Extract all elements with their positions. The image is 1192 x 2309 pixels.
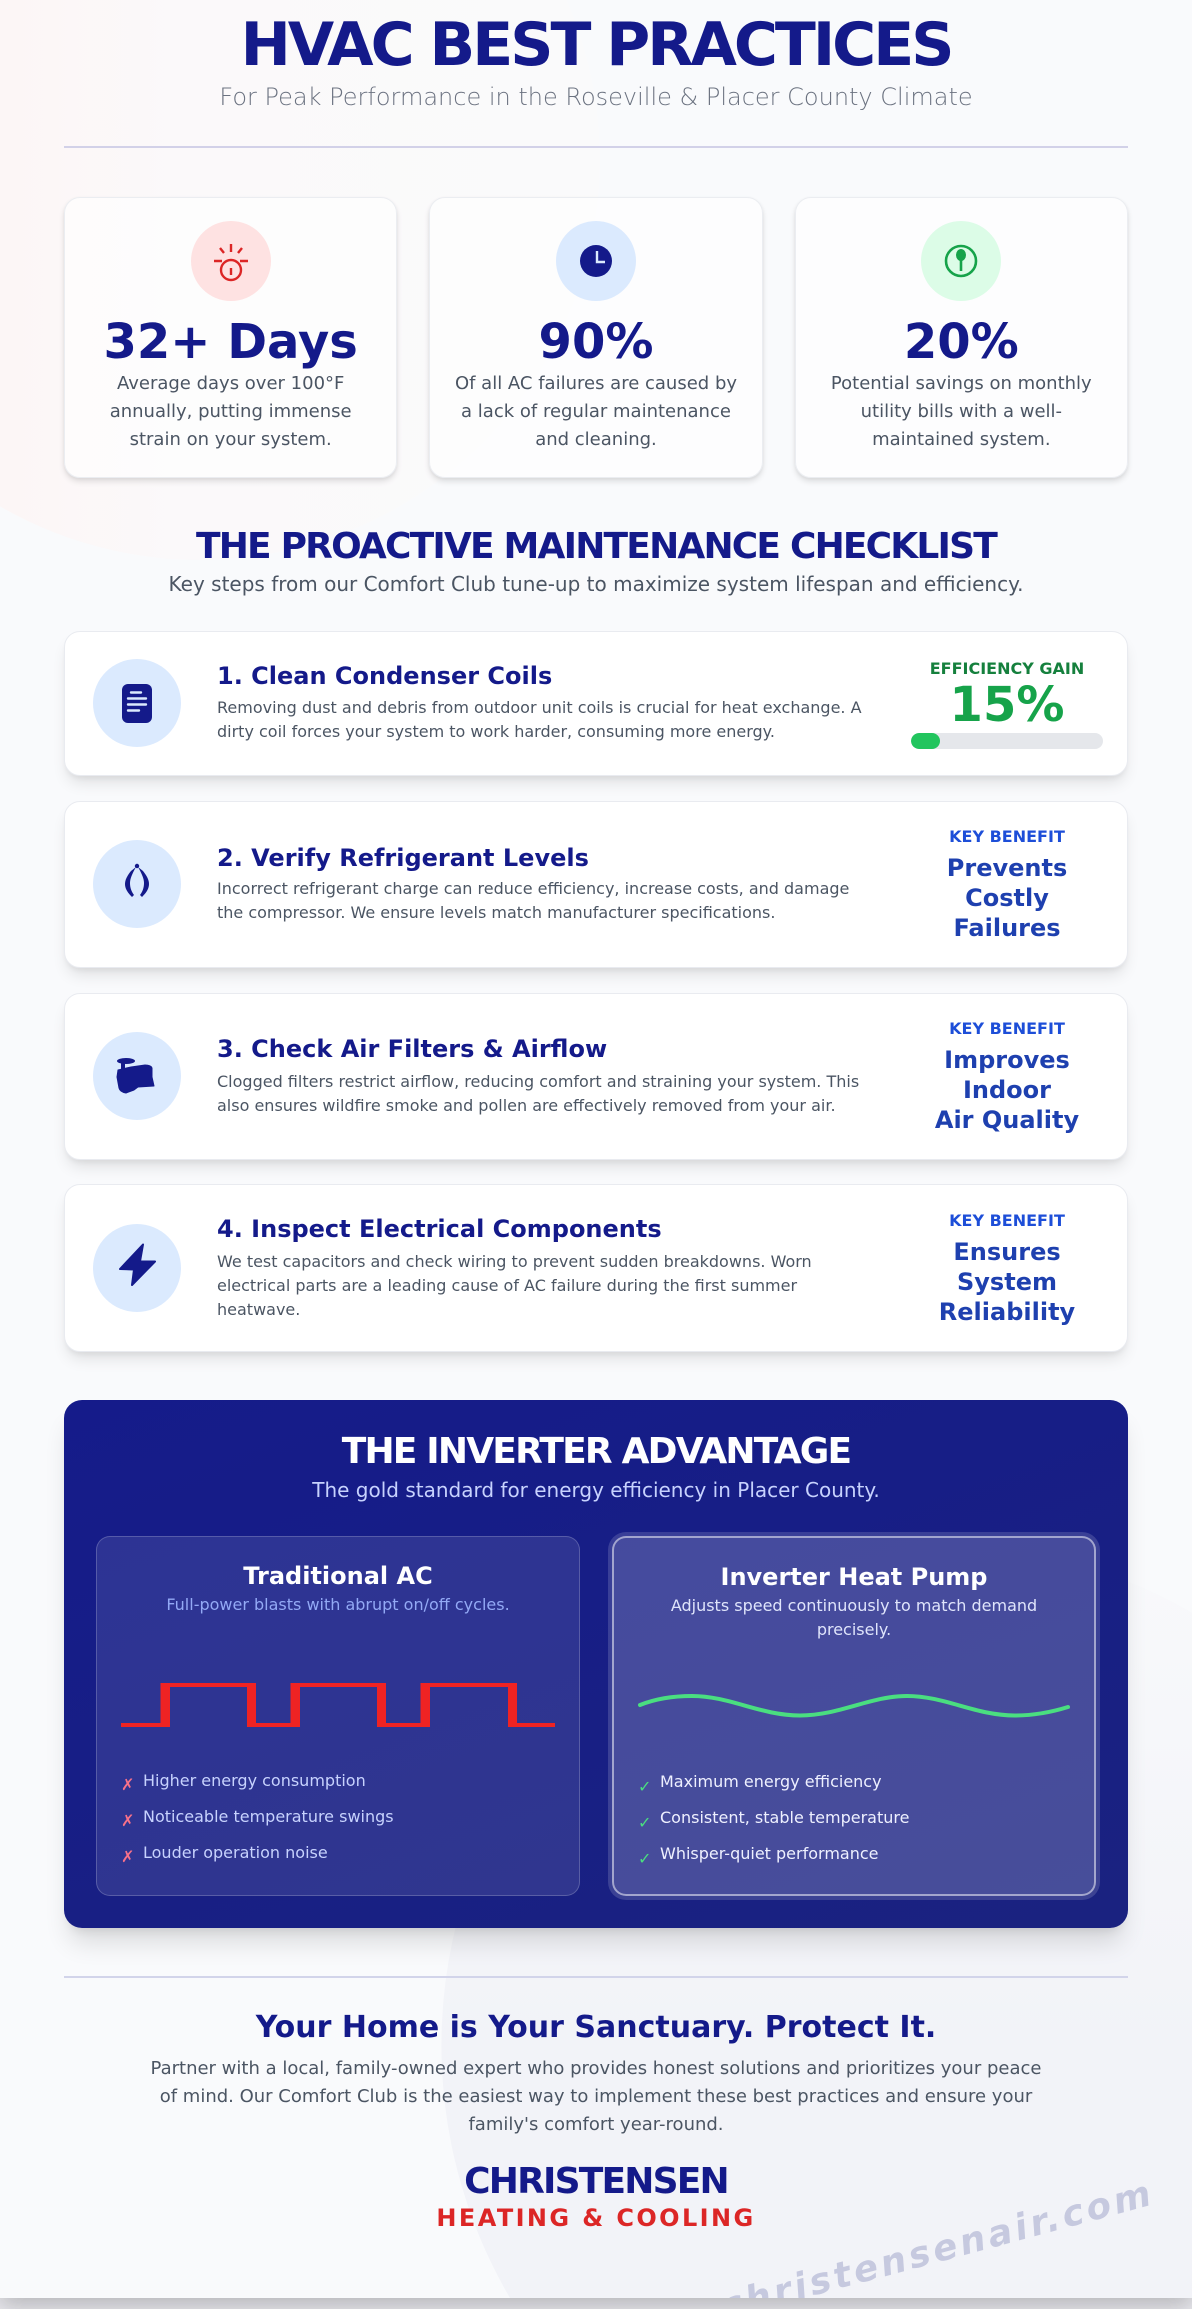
step description: Incorrect refrigerant charge can reduce efficiency, increase costs, and damage [217, 879, 849, 898]
stat description: a lack of regular maintenance [461, 401, 731, 422]
benefit text: Air Quality [935, 1106, 1079, 1134]
drawback marker: ✗ [121, 1775, 134, 1794]
card title: Traditional AC [243, 1562, 433, 1590]
list: drawbacks [121, 1771, 394, 1866]
drawback marker: ✗ [121, 1847, 134, 1866]
stat card: 32+ days [64, 197, 397, 478]
brand tagline: HEATING & COOLING [436, 2204, 756, 2232]
stat value: 20% [904, 314, 1019, 370]
footer divider [64, 1976, 1128, 1978]
benefit text [939, 1238, 1075, 1326]
card subtitle [671, 1596, 1037, 1639]
drawback text: Higher energy consumption [143, 1771, 366, 1790]
stat card: 20% [795, 197, 1128, 478]
stat value: 32+ Days [103, 314, 358, 370]
brand name: CHRISTENSEN [464, 2161, 728, 2202]
benefit text [947, 854, 1067, 942]
step title: 4. Inspect Electrical Components [217, 1215, 662, 1243]
stat description [831, 373, 1092, 450]
step description: We test capacitors and check wiring to prevent sudden breakdowns. Worn [217, 1252, 812, 1271]
stat description: and cleaning. [535, 429, 657, 450]
step title: 1. Clean Condenser Coils [217, 662, 552, 690]
icon: refrigerant drop [93, 840, 181, 928]
step description: Removing dust and debris from outdoor unit coils is crucial for heat exchange. A [217, 698, 862, 717]
chart: on/off cycle line [121, 1683, 555, 1727]
stat description: annually, putting immense [110, 401, 352, 422]
stat description: strain on your system. [130, 429, 332, 450]
footer paragraph [151, 2058, 1041, 2135]
benefit text: Maximum energy efficiency [660, 1772, 882, 1791]
subtitle: For Peak Performance in the Roseville & Placer County Climate [219, 83, 973, 111]
drawback text: Noticeable temperature swings [143, 1807, 394, 1826]
card subtitle: precisely. [817, 1620, 891, 1639]
checklist card 2 [64, 801, 1128, 968]
icon: coil document [93, 659, 181, 747]
stat description [455, 373, 737, 450]
icon: lightning bolt [93, 1224, 181, 1312]
panel: inverter advantage [64, 1400, 1128, 1928]
step description: electrical parts are a leading cause of AC failure during the first summer [217, 1276, 797, 1295]
stat card: 90% [429, 197, 763, 478]
efficiency gain metric [911, 659, 1103, 749]
footer heading: Your Home is Your Sanctuary. Protect It. [256, 2010, 936, 2045]
step description [217, 879, 849, 922]
step description: dirty coil forces your system to work harder, consuming more energy. [217, 722, 775, 741]
comparison: traditional AC [96, 1536, 580, 1896]
benefit marker: ✓ [638, 1813, 651, 1832]
benefit label: KEY BENEFIT [949, 1211, 1065, 1230]
checklist card 4 [64, 1184, 1128, 1352]
progress bar [911, 733, 1103, 749]
stat description: Potential savings on monthly [831, 373, 1092, 394]
stat description: Average days over 100°F [117, 373, 344, 394]
checklist card 1 [64, 631, 1128, 776]
benefit text [935, 1046, 1079, 1134]
step description [217, 698, 862, 741]
benefit label: KEY BENEFIT [949, 827, 1065, 846]
key benefit [939, 1211, 1075, 1326]
benefit text: Prevents [947, 854, 1067, 882]
icon: heat sun [191, 221, 271, 301]
panel subheading: The gold standard for energy efficiency in Placer County. [312, 1478, 880, 1502]
chart: smooth modulation line [638, 1694, 1070, 1718]
key benefit [935, 1019, 1079, 1134]
benefit marker: ✓ [638, 1777, 651, 1796]
step description [217, 1072, 859, 1115]
benefit marker: ✓ [638, 1849, 651, 1868]
benefit text: Whisper-quiet performance [660, 1844, 878, 1863]
benefit text: Consistent, stable temperature [660, 1808, 909, 1827]
step description [217, 1252, 812, 1319]
card title: Inverter Heat Pump [721, 1563, 987, 1591]
key benefit [947, 827, 1067, 942]
footer paragraph: of mind. Our Comfort Club is the easiest way to implement these best practices and ensure your [160, 2086, 1032, 2107]
metric value: 15% [950, 677, 1064, 733]
stat description: utility bills with a well- [861, 401, 1062, 422]
drawback text: Louder operation noise [143, 1843, 328, 1862]
panel heading: THE INVERTER ADVANTAGE [342, 1431, 850, 1472]
benefit text: Failures [953, 914, 1061, 942]
section subheading: Key steps from our Comfort Club tune-up to maximize system lifespan and efficiency. [169, 572, 1023, 596]
benefit text: Indoor [963, 1076, 1051, 1104]
step title: 2. Verify Refrigerant Levels [217, 844, 589, 872]
step description: also ensures wildfire smoke and pollen are effectively removed from your air. [217, 1096, 836, 1115]
benefit text: Reliability [939, 1298, 1075, 1326]
title: HVAC BEST PRACTICES [241, 10, 951, 80]
icon: air filter [93, 1032, 181, 1120]
step description: Clogged filters restrict airflow, reducing comfort and straining your system. This [217, 1072, 859, 1091]
stat description: maintained system. [872, 429, 1051, 450]
step title: 3. Check Air Filters & Airflow [217, 1035, 607, 1063]
step description: heatwave. [217, 1300, 300, 1319]
benefit text: System [957, 1268, 1057, 1296]
stat description [110, 373, 352, 450]
card subtitle: Adjusts speed continuously to match demand [671, 1596, 1037, 1615]
header divider [64, 146, 1128, 148]
icon: savings [921, 221, 1001, 301]
benefit text: Improves [944, 1046, 1070, 1074]
benefit text: Ensures [953, 1238, 1061, 1266]
drawback marker: ✗ [121, 1811, 134, 1830]
checklist card 3 [64, 993, 1128, 1160]
footer paragraph: Partner with a local, family-owned expert who provides honest solutions and prioritizes your peace [151, 2058, 1041, 2079]
comparison: inverter heat pump [612, 1536, 1096, 1896]
stat value: 90% [539, 314, 653, 370]
footer paragraph: family's comfort year-round. [468, 2114, 724, 2135]
benefit text: Costly [965, 884, 1049, 912]
card subtitle: Full-power blasts with abrupt on/off cycles. [166, 1595, 510, 1614]
benefit label: KEY BENEFIT [949, 1019, 1065, 1038]
metric label: EFFICIENCY GAIN [930, 659, 1084, 678]
stat description: Of all AC failures are caused by [455, 373, 737, 394]
icon: clock [556, 221, 636, 301]
section heading: checklist: THE PROACTIVE MAINTENANCE CHECKLIST [196, 526, 996, 567]
step description: the compressor. We ensure levels match manufacturer specifications. [217, 903, 775, 922]
list: benefits [638, 1772, 909, 1868]
